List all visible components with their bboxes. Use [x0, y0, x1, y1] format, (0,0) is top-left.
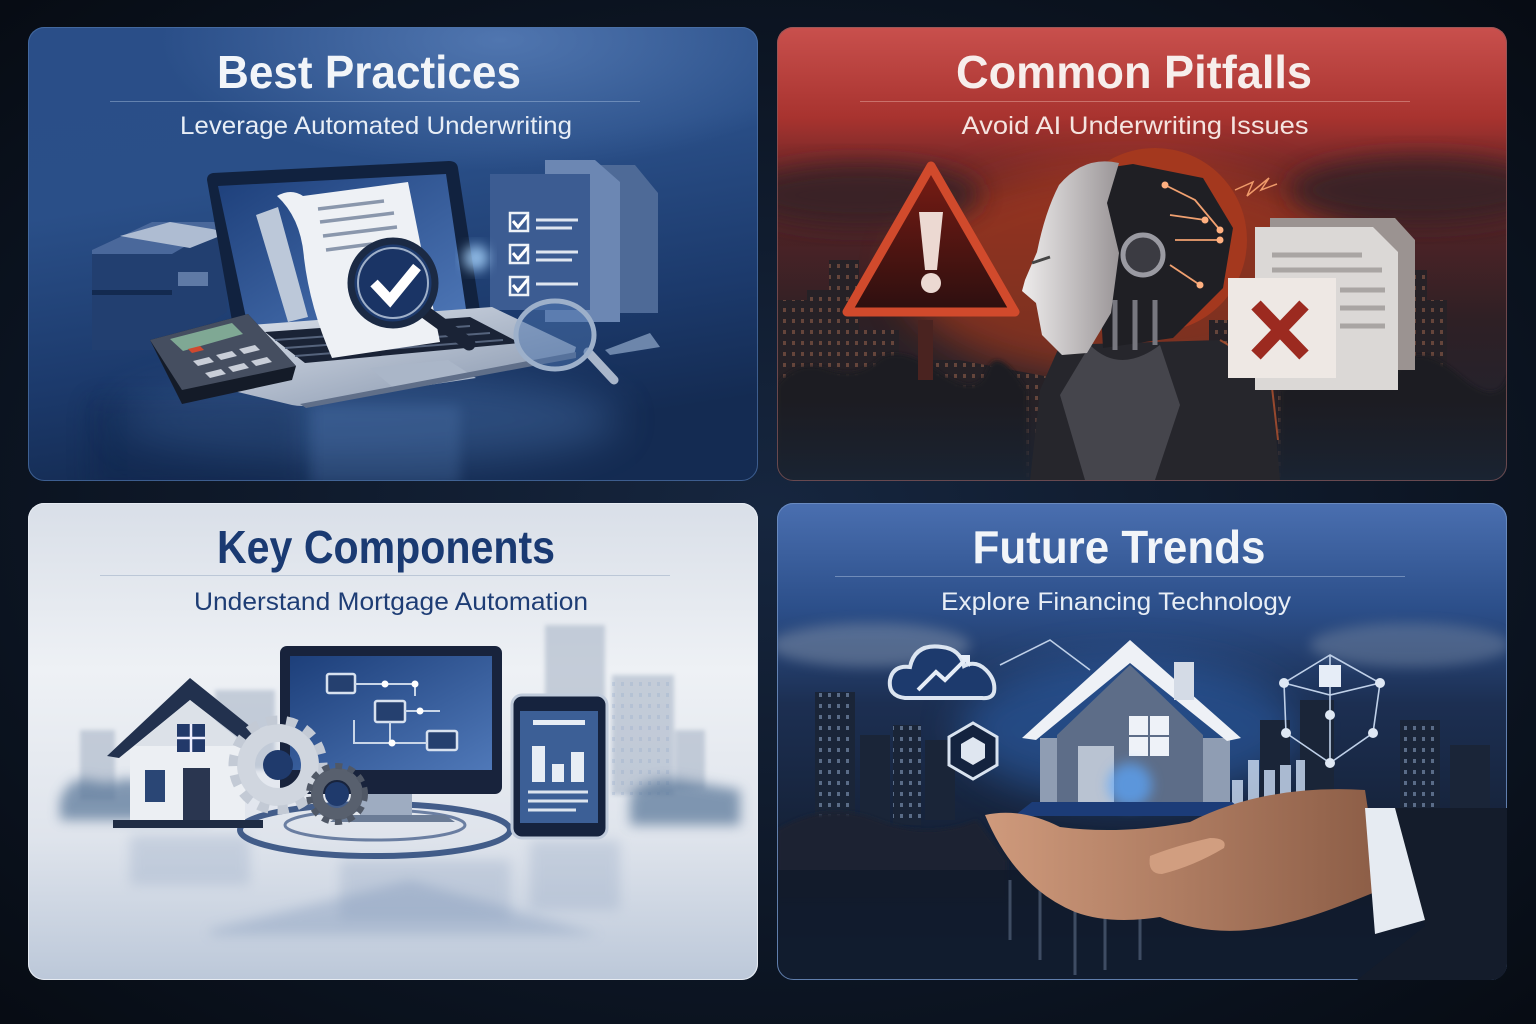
subheading: explore financing technology: Explore Financing Technology: [941, 588, 1292, 616]
icon: gears: [233, 720, 365, 822]
subheading: avoid ai underwriting issues: Avoid AI Underwriting Issues: [962, 112, 1308, 140]
icon: bar chart: [1232, 760, 1305, 806]
icon: rejected documents: [1228, 218, 1415, 390]
heading: key components: Key Components: [217, 521, 555, 573]
icon: swirl base: [240, 804, 510, 856]
heading: best practices: Best Practices: [217, 46, 521, 98]
icon: blue glow: [463, 245, 489, 271]
icon: cloud growth: [890, 646, 994, 698]
icon: magnifier with check: [351, 241, 469, 344]
subheading: understand mortgage automation: Understand Mortgage Automation: [194, 588, 588, 616]
icon: calculator: [150, 314, 296, 404]
icon: network hexagon: [1000, 640, 1385, 768]
heading: future trends: Future Trends: [972, 521, 1266, 573]
subheading: leverage automated underwriting: Leverage Automated Underwriting: [180, 112, 572, 140]
icon: small magnifier and pen: [516, 301, 660, 380]
icon: document stack with checklist: [490, 160, 658, 322]
panel: future trends: [770, 503, 1510, 980]
icon: house on hand: [1014, 640, 1250, 816]
icon: paper document: [256, 182, 440, 358]
icon: house: [107, 678, 263, 828]
icon: monitor workflow: [280, 646, 502, 822]
icon: printer stack: [92, 222, 230, 350]
icon: smartphone chart: [512, 695, 607, 838]
icon: hexagon cube: [949, 723, 997, 779]
panel: common pitfalls: [777, 27, 1507, 481]
heading: common pitfalls: Common Pitfalls: [956, 46, 1312, 98]
icon: warning triangle: [847, 166, 1015, 380]
icon: laptop: [190, 161, 576, 408]
icon: ai robot head: [1022, 148, 1280, 480]
icon: hand: [985, 789, 1507, 980]
panel: best practices: [28, 27, 758, 481]
panel: key components: [28, 503, 758, 980]
